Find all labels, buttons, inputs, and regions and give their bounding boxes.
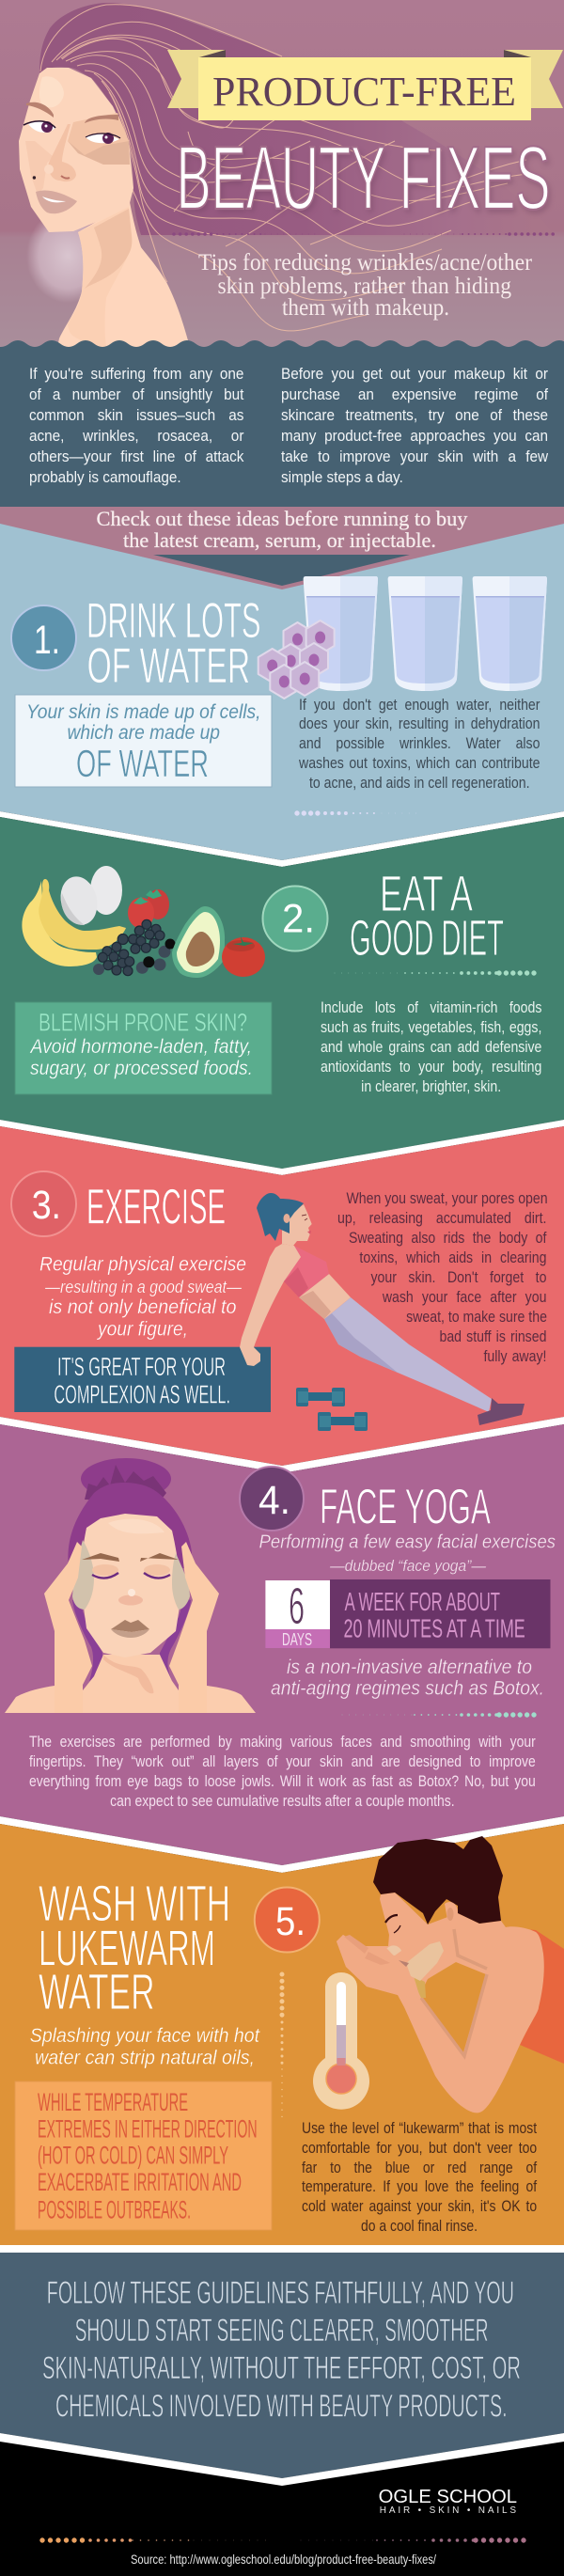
- callout: skin made of water: OF WATER: [76, 742, 209, 785]
- intro text right: simple steps a day.: [280, 468, 402, 486]
- heading: wash with lukewarm water: [39, 1876, 230, 2020]
- intro text right: many product-free approaches you can: [280, 427, 548, 445]
- step 5 body text: temperature. If you love the feeling of: [302, 2177, 537, 2195]
- title ribbon: [167, 50, 563, 120]
- follow-up text: is a non-invasive alternative to: [287, 1657, 532, 1678]
- step 4 body text: everything from eye bags to loose jowls. Will it work as fast as Botox? No, but you: [29, 1772, 535, 1790]
- decorative dots: [342, 1714, 539, 1716]
- step 3 body text: toxins, which aids in clearing: [359, 1249, 546, 1266]
- step 3 body text: Sweating also rids the body of: [349, 1229, 546, 1247]
- stat box: 6 days a week: [265, 1577, 551, 1649]
- intro text left: others—your first line of attack: [29, 448, 243, 465]
- banner: check out these ideas: Check out these ideas before running to buy: [96, 507, 468, 530]
- callout: temperature extremes: (HOT OR COLD) CAN SIMPLY: [38, 2142, 228, 2170]
- number badge 2: [263, 886, 327, 951]
- woman face and neck: [19, 68, 190, 347]
- title ribbon: PRODUCT-FREE: [212, 69, 516, 115]
- heading: drink lots of water: DRINK LOTS: [86, 593, 261, 649]
- icon: dumbbells: [296, 1388, 368, 1431]
- lead text: Splashing your face with hot: [30, 2025, 260, 2047]
- callout: great for complexion: IT'S GREAT FOR YOUR: [57, 1352, 226, 1381]
- heading: wash with lukewarm water: WATER: [39, 1964, 155, 2020]
- avocado: [172, 906, 225, 978]
- hair: [39, 3, 555, 235]
- number badge 1: [11, 605, 76, 670]
- decorative vertical dots: [280, 1974, 284, 2119]
- lead text: is not only beneficial to: [49, 1296, 237, 1318]
- intro text left: of a number of unsightly but: [29, 385, 243, 403]
- illustration: woman massaging face: [5, 1458, 256, 1713]
- panel: introduction: [0, 340, 564, 507]
- callout: blemish prone skin: sugary, or processed foods.: [30, 1058, 253, 1079]
- bananas: [22, 879, 126, 966]
- logo: ogle school: HAIR • SKIN • NAILS: [380, 2505, 516, 2516]
- decorative dots: [335, 972, 539, 974]
- step 1 body text: and possible wrinkles. Water also: [299, 734, 540, 752]
- callout: great for complexion: [14, 1347, 271, 1412]
- step 1 body text: If you don't get enough water, neither: [299, 696, 540, 714]
- step 2 body text: [321, 998, 541, 1095]
- lead text: Regular physical exercise: [39, 1254, 246, 1276]
- callout: temperature extremes: EXACERBATE IRRITATION AND: [38, 2168, 242, 2196]
- step 3 body text: fully away!: [483, 1347, 546, 1365]
- number badge 3: [11, 1171, 76, 1236]
- callout: skin made of water: Your skin is made up of cells,: [26, 701, 261, 723]
- follow-up text: anti-aging regimes such as Botox.: [271, 1678, 544, 1700]
- stat box: 6 days a week: DAYS: [282, 1630, 312, 1649]
- heading: wash with lukewarm water: LUKEWARM: [39, 1921, 215, 1977]
- step 3 body text: sweat, to make sure the: [406, 1308, 547, 1326]
- step 1 body text: washes out toxins, which can contribute: [299, 754, 540, 772]
- step 4 body text: can expect to see cumulative results after a couple months.: [110, 1792, 454, 1810]
- subtitle: Tips for reducing wrinkles/acne/other: [198, 250, 533, 275]
- heading: eat a good diet: EAT A: [380, 866, 473, 922]
- callout: skin made of water: which are made up: [68, 722, 220, 744]
- follow-up text: [271, 1657, 544, 1700]
- step 5 body text: comfortable for you, but don't veer too: [302, 2139, 537, 2157]
- number badge 5: 5.: [275, 1899, 306, 1944]
- intro text left: [29, 365, 244, 486]
- callout: temperature extremes: [15, 2081, 272, 2230]
- intro text right: purchase an expensive regime of: [280, 385, 548, 403]
- subtitle: skin problems, rather than hiding: [218, 274, 511, 299]
- icon: healthy foods: [22, 866, 265, 978]
- panel: step 1 drink water: [0, 507, 564, 867]
- panel: header: [0, 0, 564, 347]
- heading: drink lots of water: OF WATER: [87, 638, 250, 694]
- intro text left: common skin issues–such as: [29, 406, 243, 424]
- step 5 body text: cold water against your skin, it's OK to: [302, 2197, 537, 2215]
- callout: blemish prone skin: Avoid hormone-laden, fatty,: [29, 1036, 252, 1058]
- lead text: —resulting in a good sweat—: [44, 1278, 243, 1296]
- decorative dots: [297, 810, 418, 816]
- step 5 body text: far to the blue or red range of: [302, 2159, 537, 2175]
- callout: blemish prone skin: BLEMISH PRONE SKIN?: [39, 1008, 247, 1036]
- step 3 body text: [337, 1189, 547, 1365]
- intro text left: If you're suffering from any one: [29, 365, 243, 383]
- panel: step 3 exercise: [0, 1126, 564, 1472]
- callout: blemish prone skin: [15, 1002, 272, 1094]
- step 3 body text: your skin. Don't forget to: [370, 1268, 546, 1286]
- intro text right: Before you get out your makeup kit or: [280, 365, 548, 383]
- callout: skin made of water: [15, 695, 272, 787]
- panel: step 2 eat a good diet: [0, 817, 564, 1175]
- step 4 body text: fingertips. They “work out” all layers of your skin and are designed to improve: [29, 1752, 535, 1770]
- callout: temperature extremes: WHILE TEMPERATURE: [38, 2088, 188, 2116]
- glow behind neck: [26, 209, 109, 303]
- panel: closing message: [0, 2253, 564, 2486]
- intro text right: skincare treatments, try one of these: [280, 406, 548, 424]
- step 2 body text: antioxidants to your body, resulting: [321, 1058, 541, 1076]
- callout: temperature extremes: EXTREMES IN EITHER DIRECTION: [38, 2114, 258, 2143]
- heading: eat a good diet: [350, 866, 504, 966]
- step 5 body text: [302, 2119, 538, 2235]
- number badge 1: 1.: [34, 618, 60, 663]
- logo: ogle school: OGLE SCHOOL: [379, 2487, 517, 2507]
- icon: thermometer: [313, 1972, 369, 2110]
- step 3 body text: up, releasing accumulated dirt.: [337, 1209, 546, 1227]
- step 4 body text: The exercises are performed by making various faces and smoothing with your: [29, 1733, 535, 1751]
- intro text right: take to improve your skin with a few: [280, 448, 548, 465]
- intro text left: probably is camouflage.: [29, 468, 180, 486]
- heading: exercise: EXERCISE: [86, 1180, 226, 1235]
- illustration: woman washing face: [337, 1836, 564, 2113]
- eggs: [55, 866, 122, 929]
- banner: check out these ideas: [0, 507, 564, 589]
- number badge 3: 3.: [32, 1183, 61, 1228]
- step 4 body text: [29, 1733, 536, 1810]
- subtitle: [198, 250, 533, 321]
- subtitle: them with makeup.: [282, 295, 449, 321]
- step 1 body text: does your skin, resulting in dehydration: [299, 715, 540, 732]
- step 1 body text: [299, 696, 540, 792]
- panel: step 5 lukewarm water: [0, 1824, 564, 2253]
- step 2 body text: such as fruits, vegetables, fish, eggs,: [321, 1018, 541, 1036]
- callout: temperature extremes: POSSIBLE OUTBREAKS.: [38, 2195, 191, 2223]
- step 2 body text: Include lots of vitamin-rich foods: [321, 998, 541, 1016]
- number badge 4: 4.: [258, 1478, 290, 1523]
- closing text: [42, 2275, 521, 2425]
- hair strands: [40, 5, 526, 331]
- source line: Source: http://www.ogleschool.edu/blog/product-free-beauty-fixes/: [131, 2552, 436, 2567]
- icon: three glasses of water: [304, 576, 547, 691]
- lead text: water can strip natural oils,: [35, 2048, 255, 2069]
- heading: drink lots of water: [86, 593, 261, 694]
- lead text: [39, 1254, 246, 1341]
- number badge 4: [240, 1467, 304, 1531]
- stat box: 6 days a week: 6: [289, 1577, 305, 1635]
- panel: step 4 face yoga: [0, 1424, 564, 1873]
- callout: great for complexion: COMPLEXION AS WELL.: [54, 1380, 230, 1409]
- decorative dots: [42, 2537, 525, 2543]
- lead text: —dubbed “face yoga”—: [329, 1557, 487, 1575]
- heading: wash with lukewarm water: WASH WITH: [39, 1876, 230, 1932]
- banner: check out these ideas: the latest cream, serum, or injectable.: [123, 528, 436, 552]
- intro text left: acne, wrinkles, rosacea, or: [29, 427, 243, 445]
- step 3 body text: bad stuff is rinsed: [439, 1327, 546, 1345]
- strawberries: [128, 889, 169, 929]
- loose berries: [93, 938, 175, 975]
- lead text: [30, 2025, 260, 2069]
- step 5 body text: Use the level of “lukewarm” that is most: [302, 2119, 537, 2137]
- lead text: [259, 1532, 556, 1575]
- step 3 body text: wash your face after you: [382, 1288, 546, 1306]
- panel: footer: [39, 2487, 526, 2567]
- step 5 body text: do a cool final rinse.: [361, 2217, 478, 2235]
- tomato: [222, 936, 265, 977]
- blackberries: [98, 919, 164, 976]
- step 2 body text: in clearer, brighter, skin.: [361, 1077, 501, 1095]
- intro text right: [280, 365, 549, 486]
- decorative dotted rule: [174, 232, 556, 236]
- lead text: your figure,: [96, 1319, 188, 1341]
- step 3 body text: When you sweat, your pores open: [346, 1189, 547, 1207]
- number badge 5: [255, 1888, 320, 1952]
- step 1 body text: to acne, and aids in cell regeneration.: [309, 774, 529, 792]
- icon: skin cells: [258, 620, 335, 699]
- step 2 body text: and whole grains can add defensive: [321, 1038, 541, 1056]
- number badge 2: 2.: [282, 897, 315, 942]
- illustration: woman exercising: [240, 1193, 525, 1425]
